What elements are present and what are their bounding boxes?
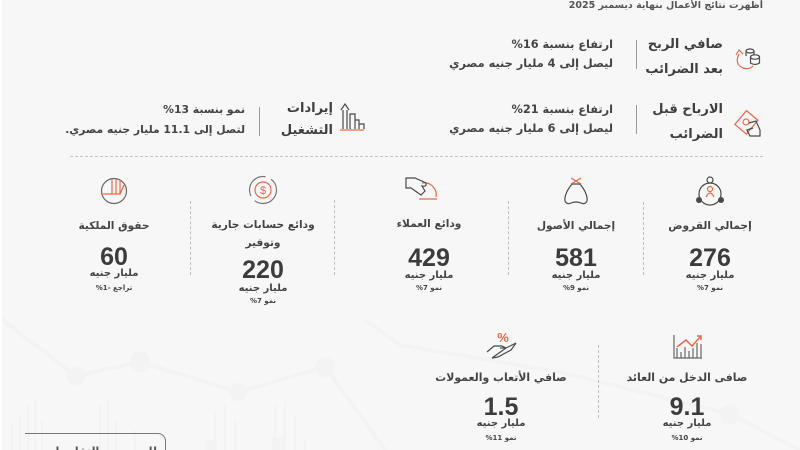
icon: money bag: [564, 178, 588, 204]
icon: coins with arrow: [736, 48, 760, 70]
callout box cut off at bottom: [25, 433, 166, 450]
icon: hand with banknote: [734, 110, 761, 137]
panel: customer deposits: [397, 177, 461, 292]
value: 60: [100, 243, 128, 271]
title: صافي الأتعاب والعمولات: [435, 371, 567, 384]
value: 220: [242, 256, 284, 284]
title: وتوفير: [245, 237, 281, 249]
change text: ليصل إلى 4 مليار جنيه مصري: [449, 56, 613, 70]
metric name: بعد الضرائب: [645, 62, 723, 76]
change text: [449, 38, 613, 70]
title: إجمالي القروض: [668, 220, 752, 232]
unit: مليار جنيه: [552, 270, 600, 281]
metric name: التشغيل: [281, 123, 333, 138]
title: ودائع العملاء: [397, 218, 461, 230]
unit: مليار جنيه: [663, 418, 711, 429]
growth: نمو 7%: [697, 284, 723, 292]
panel: operating revenue: [65, 101, 365, 138]
value: 1.5: [484, 393, 518, 421]
growth: تراجع -1%: [96, 284, 132, 292]
unit: مليار جنيه: [686, 270, 734, 281]
metric name: الضرائب: [670, 126, 723, 142]
change text: لتصل إلى 11.1 مليار جنيه مصري.: [65, 123, 245, 136]
panel: total loans: [668, 176, 752, 292]
change text: [449, 103, 613, 135]
divider: [259, 107, 260, 136]
panel: net fees and commissions: [435, 330, 567, 442]
panel: current and savings deposits: [211, 176, 315, 305]
metric name: [645, 37, 723, 76]
panel: profit before tax: [449, 102, 761, 142]
value: 9.1: [670, 393, 704, 421]
change text: [65, 103, 245, 136]
value: 276: [689, 244, 731, 272]
value: 429: [408, 244, 450, 272]
unit: مليار جنيه: [405, 270, 453, 281]
title: صافى الدخل من العائد: [627, 371, 747, 384]
icon: hand with percent: [486, 330, 516, 359]
growth: نمو 7%: [416, 284, 442, 292]
intro heading: أظهرت نتائج الأعمال بنهاية ديسمبر 2025: [569, 0, 763, 11]
icon: dollar cycle: [248, 176, 278, 204]
panel: net profit after tax: [449, 37, 760, 76]
divider: [636, 105, 637, 134]
metric name: [652, 102, 723, 142]
change text: نمو بنسبة 13%: [163, 103, 245, 116]
growth: نمو 9%: [563, 284, 589, 292]
panel: equity: [78, 178, 150, 292]
title: [211, 219, 315, 249]
metric name: صافي الربح: [648, 37, 723, 52]
unit: مليار جنيه: [90, 268, 138, 279]
icon: rising bars: [340, 103, 365, 131]
change text: ليصل إلى 6 مليار جنيه مصري: [449, 122, 613, 134]
value: 581: [555, 244, 597, 272]
panel: net interest income: [627, 335, 747, 442]
left edge strip: [0, 0, 2, 450]
icon: group in circle: [696, 176, 724, 206]
section divider: [70, 156, 763, 157]
change text: ارتفاع بنسبة 16%: [512, 38, 613, 51]
growth: نمو 11%: [486, 434, 516, 442]
panel: total assets: [537, 178, 615, 292]
title: حقوق الملكية: [78, 220, 150, 232]
title: ودائع حسابات جارية: [211, 219, 315, 231]
unit: مليار جنيه: [477, 418, 525, 429]
metric name: الارباح قبل: [652, 102, 723, 117]
unit: مليار جنيه: [239, 283, 287, 294]
icon: line chart over bars: [673, 335, 702, 359]
divider: [636, 40, 637, 69]
icon: pie with bars: [100, 178, 128, 204]
growth: نمو 7%: [250, 297, 276, 305]
icon: hand with percent: %: [497, 330, 509, 345]
icon: dollar cycle: $: [260, 185, 266, 197]
icon: hand dropping coin: [405, 177, 437, 200]
growth: نمو 10%: [672, 434, 702, 442]
title: إجمالي الأصول: [537, 220, 615, 232]
metric name: [281, 101, 333, 138]
metric name: إيرادات: [287, 101, 333, 116]
change text: ارتفاع بنسبة 21%: [512, 103, 613, 116]
